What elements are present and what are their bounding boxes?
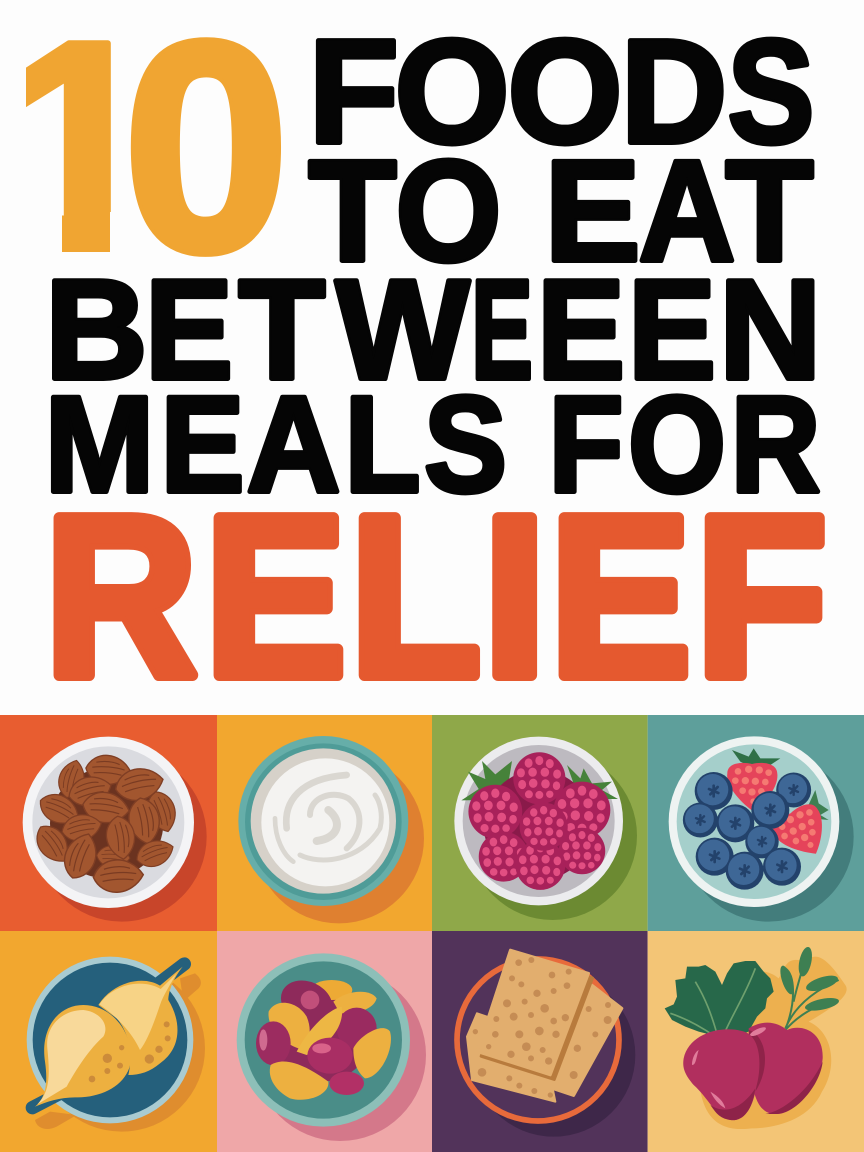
tile: crackers	[432, 931, 648, 1152]
number 10	[0, 0, 289, 314]
title line: RELIEF: E	[205, 470, 346, 724]
title line: FOODS: O	[508, 10, 623, 174]
title line: BETWEEEN: E	[145, 250, 233, 410]
title line: TO EAT: T	[308, 130, 396, 292]
tile: beets	[648, 931, 864, 1152]
title line: BETWEEEN: T	[238, 250, 325, 410]
title line: FOODS: S	[728, 10, 814, 174]
title line: TO EAT: T	[726, 130, 813, 292]
title line: MEALS FOR: R	[730, 368, 820, 522]
title line: RELIEF: R	[45, 470, 197, 724]
title line: RELIEF: E	[550, 470, 691, 724]
title line: TO EAT: A	[638, 130, 736, 292]
title line: RELIEF: I	[483, 470, 546, 724]
tile: almonds	[0, 715, 217, 931]
title line: BETWEEEN: E	[471, 250, 533, 410]
title	[0, 0, 827, 724]
title line: MEALS FOR: L	[344, 368, 420, 522]
title line: TO EAT: E	[544, 130, 641, 292]
food tile grid	[0, 715, 864, 1152]
tile: yogurt	[217, 715, 434, 931]
title line: MEALS FOR: O	[628, 368, 726, 522]
title line: MEALS FOR: F	[548, 368, 624, 522]
title line: BETWEEEN: B	[45, 250, 148, 410]
title line: MEALS FOR: S	[424, 368, 507, 522]
title line: BETWEEEN: N	[719, 250, 822, 410]
title line: BETWEEEN: W	[336, 250, 470, 410]
title line: FOODS: F	[308, 10, 399, 174]
title line: MEALS FOR: E	[160, 368, 244, 522]
tile: pears	[0, 931, 217, 1152]
title line: RELIEF: L	[350, 470, 481, 724]
title line: FOODS: O	[394, 10, 510, 174]
title line: MEALS FOR: A	[246, 368, 340, 522]
title line: TO EAT: O	[396, 130, 502, 292]
title line: BETWEEEN: E	[628, 250, 716, 410]
title line: BETWEEEN: E	[537, 250, 625, 410]
tile: raspberries	[432, 715, 648, 931]
title line: FOODS: D	[620, 10, 727, 174]
tile: blueberries and strawberries	[648, 715, 864, 931]
title line: MEALS FOR: M	[44, 368, 154, 522]
tile: dried fruit mix	[217, 931, 434, 1152]
title line: RELIEF: F	[696, 470, 827, 724]
page background	[0, 0, 864, 715]
